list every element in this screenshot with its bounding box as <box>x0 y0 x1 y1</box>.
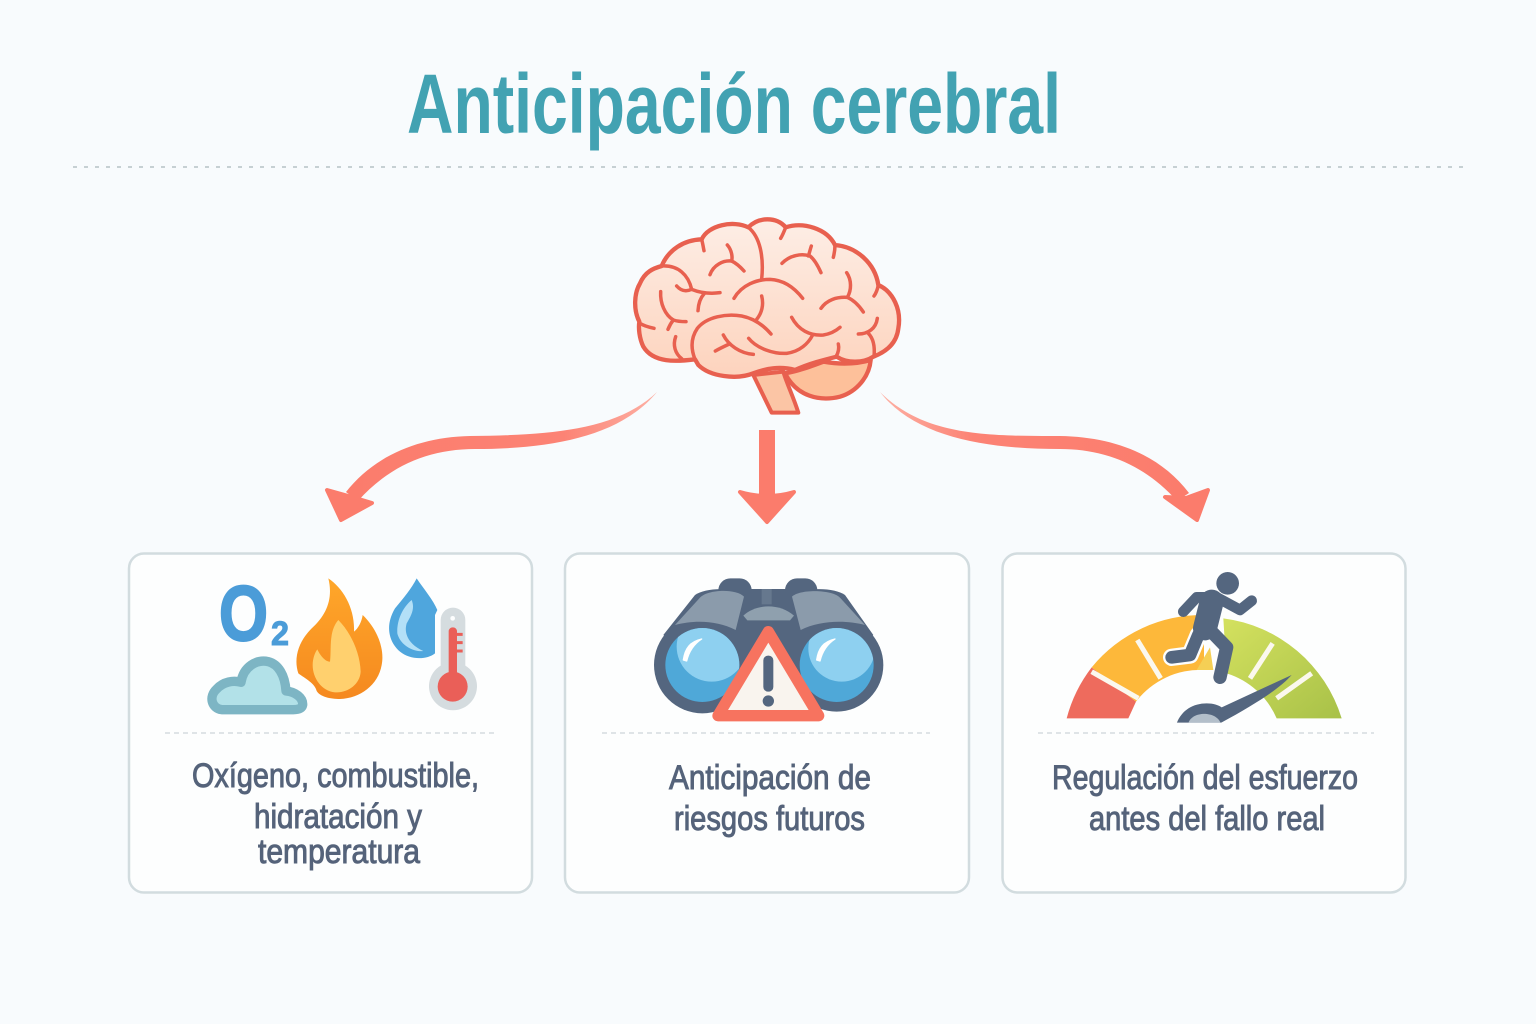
binocular highlights <box>675 589 865 630</box>
icon: warning triangle <box>718 632 819 716</box>
text: card 2: riesgos futuros <box>674 800 865 838</box>
text: card 2 <box>669 759 871 838</box>
icon: O2: O <box>219 569 268 657</box>
text: card 3: antes del fallo real <box>1089 800 1325 838</box>
gauge arc <box>1067 615 1342 718</box>
text: card 2: Anticipación de <box>669 759 871 797</box>
icon: thermometer <box>429 608 477 710</box>
arrow: left <box>327 392 657 520</box>
brain folds <box>640 227 878 359</box>
panel: effort regulation <box>1002 554 1406 892</box>
arrow: center <box>740 430 794 522</box>
icon: binoculars with warning <box>654 578 883 716</box>
text: card 3 <box>1052 759 1358 838</box>
panel: physiological signals <box>129 554 532 892</box>
icon: runner <box>1172 572 1252 677</box>
icon: brain <box>635 219 899 413</box>
text: card 1: hidratación y <box>254 798 422 836</box>
lenses <box>663 612 877 705</box>
panel: future risks <box>565 554 969 892</box>
text: card 1: temperatura <box>258 833 420 871</box>
icon: O2: 2 <box>271 615 289 653</box>
icon: water drop <box>389 578 437 658</box>
icon: gauge with runner <box>1067 572 1342 723</box>
icon: cloud <box>212 661 303 710</box>
text: card 1: Oxígeno, combustible, <box>192 757 479 795</box>
icon: flame <box>296 578 382 699</box>
gauge needle <box>1177 675 1292 723</box>
title: Anticipación cerebral <box>407 57 1061 151</box>
arrow: right <box>880 392 1208 520</box>
text: card 1 <box>192 757 479 871</box>
icon: oxygen, cloud, flame, water drop, thermometer <box>212 569 477 710</box>
text: card 3: Regulación del esfuerzo <box>1052 759 1358 797</box>
